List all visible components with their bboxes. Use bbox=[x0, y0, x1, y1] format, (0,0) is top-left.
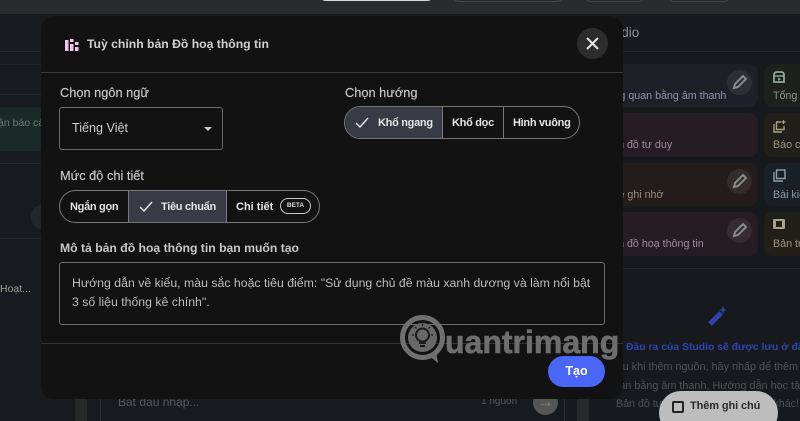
row divider bbox=[0, 94, 50, 95]
card: audio overview bbox=[577, 64, 758, 107]
segment label: Khổ ngang bbox=[378, 117, 433, 129]
card: mind map bbox=[577, 113, 758, 157]
beta badge: BETA bbox=[287, 202, 304, 209]
background: centre chat panel bbox=[76, 14, 565, 421]
card text: Bản đồ tư duy bbox=[605, 139, 672, 151]
edit icon bbox=[727, 218, 752, 243]
toolbar pill buttons bbox=[320, 0, 433, 1]
close button bbox=[577, 28, 608, 59]
detail segmented control bbox=[59, 190, 320, 223]
top bar bbox=[0, 0, 800, 14]
card: infographic bbox=[577, 212, 758, 256]
card: video overview bbox=[764, 64, 800, 107]
label: orientation: Chọn hướng bbox=[345, 85, 417, 100]
card: quiz bbox=[764, 163, 800, 206]
toolbar outlined pill 3 bbox=[668, 0, 730, 2]
card: flashcards bbox=[577, 163, 758, 206]
background: right studio panel bbox=[589, 14, 800, 421]
card text: Tổng quan bằng âm thanh bbox=[601, 90, 726, 102]
button label: Thêm ghi chú bbox=[690, 400, 760, 412]
dropdown arrow bbox=[204, 127, 212, 131]
segment label: Chi tiết bbox=[236, 201, 273, 213]
segment label: Tiêu chuẩn bbox=[161, 201, 216, 213]
studio empty description line 2: Tổng quan bằng âm thanh, Hướng dẫn học tập bbox=[580, 380, 800, 392]
background: left sources panel bbox=[0, 14, 76, 421]
truncated source title: Hoạt... bbox=[0, 283, 31, 295]
segment label: Khổ dọc bbox=[452, 117, 494, 129]
create button bbox=[548, 356, 605, 387]
edit icon bbox=[727, 169, 752, 194]
orientation segmented control bbox=[344, 106, 580, 139]
icon: magic wand bbox=[708, 306, 727, 326]
section divider bbox=[623, 268, 800, 269]
studio heading: Studio bbox=[601, 25, 639, 40]
description textarea bbox=[59, 262, 605, 325]
label: description: Mô tả bản đồ hoạ thông tin bạn muốn tạo bbox=[60, 241, 299, 255]
check icon bbox=[356, 118, 368, 128]
segment: detailed bbox=[236, 198, 311, 214]
row divider bbox=[0, 64, 50, 65]
source count: 1 nguồn bbox=[481, 396, 517, 407]
footer divider bbox=[41, 343, 623, 344]
studio empty description: Sau khi thêm nguồn, hãy nhấp để thêm bbox=[610, 361, 798, 373]
send button bbox=[533, 390, 558, 415]
placeholder line 2: 3 số liệu thống kê chính". bbox=[72, 295, 210, 309]
segment: concise bbox=[60, 191, 129, 222]
studio heading divider bbox=[577, 51, 800, 52]
card icon bbox=[773, 71, 785, 83]
watermark logo bbox=[400, 315, 445, 363]
selected language: Tiếng Việt bbox=[72, 121, 128, 135]
row divider bbox=[0, 163, 50, 164]
card text: Thẻ ghi nhớ bbox=[606, 189, 664, 201]
card icon bbox=[773, 219, 785, 229]
icon: infographic bars bbox=[65, 39, 78, 51]
beta badge bbox=[280, 198, 311, 214]
edit icon bbox=[727, 70, 752, 95]
chat input placeholder: Bắt đầu nhập... bbox=[118, 395, 199, 409]
row divider bbox=[0, 51, 50, 52]
panel: studio bbox=[580, 25, 800, 410]
segment: portrait bbox=[443, 107, 504, 138]
create button: Tạo bbox=[565, 364, 588, 378]
watermark bbox=[400, 315, 619, 363]
placeholder line 1: Hướng dẫn về kiểu, màu sắc hoặc tiêu điểm: "Sử dụng chủ đề màu xanh dương và làm nổi bật bbox=[72, 276, 590, 290]
card icon bbox=[773, 169, 786, 182]
header divider bbox=[41, 72, 623, 73]
selected segment bbox=[129, 191, 227, 222]
icon: note bbox=[672, 401, 684, 413]
panel: dialog bbox=[41, 16, 623, 399]
scrollbar strip left bbox=[75, 380, 87, 421]
selected segment bbox=[345, 107, 443, 138]
card icon bbox=[773, 120, 786, 133]
dialog title: Tuỳ chỉnh bản Đồ hoạ thông tin bbox=[87, 37, 269, 51]
segment label: Ngắn gọn bbox=[70, 201, 118, 213]
send button: → bbox=[537, 392, 554, 411]
card: slide deck bbox=[764, 212, 800, 256]
language select bbox=[59, 107, 223, 150]
toolbar outlined pill 2 bbox=[585, 0, 645, 2]
label: detail level: Mức độ chi tiết bbox=[60, 168, 144, 183]
segment label: Hình vuông bbox=[513, 117, 570, 129]
sources row highlighted bbox=[0, 107, 50, 151]
studio empty description line 3: Bản đồ tư duy và nhiều thông tin khác! bbox=[616, 398, 799, 410]
scrollbar strip right bbox=[577, 380, 589, 421]
row divider bbox=[0, 238, 50, 239]
toolbar outlined pill 1 bbox=[453, 0, 563, 2]
watermark text: uantrimang bbox=[445, 324, 619, 360]
add note button bbox=[659, 391, 778, 421]
collapse button bbox=[31, 204, 57, 230]
card: reports bbox=[764, 113, 800, 157]
chat input bbox=[100, 374, 565, 421]
label: language: Chọn ngôn ngữ bbox=[60, 85, 149, 100]
card text: Bản đồ hoạ thông tin bbox=[605, 238, 704, 250]
check icon bbox=[140, 202, 152, 212]
